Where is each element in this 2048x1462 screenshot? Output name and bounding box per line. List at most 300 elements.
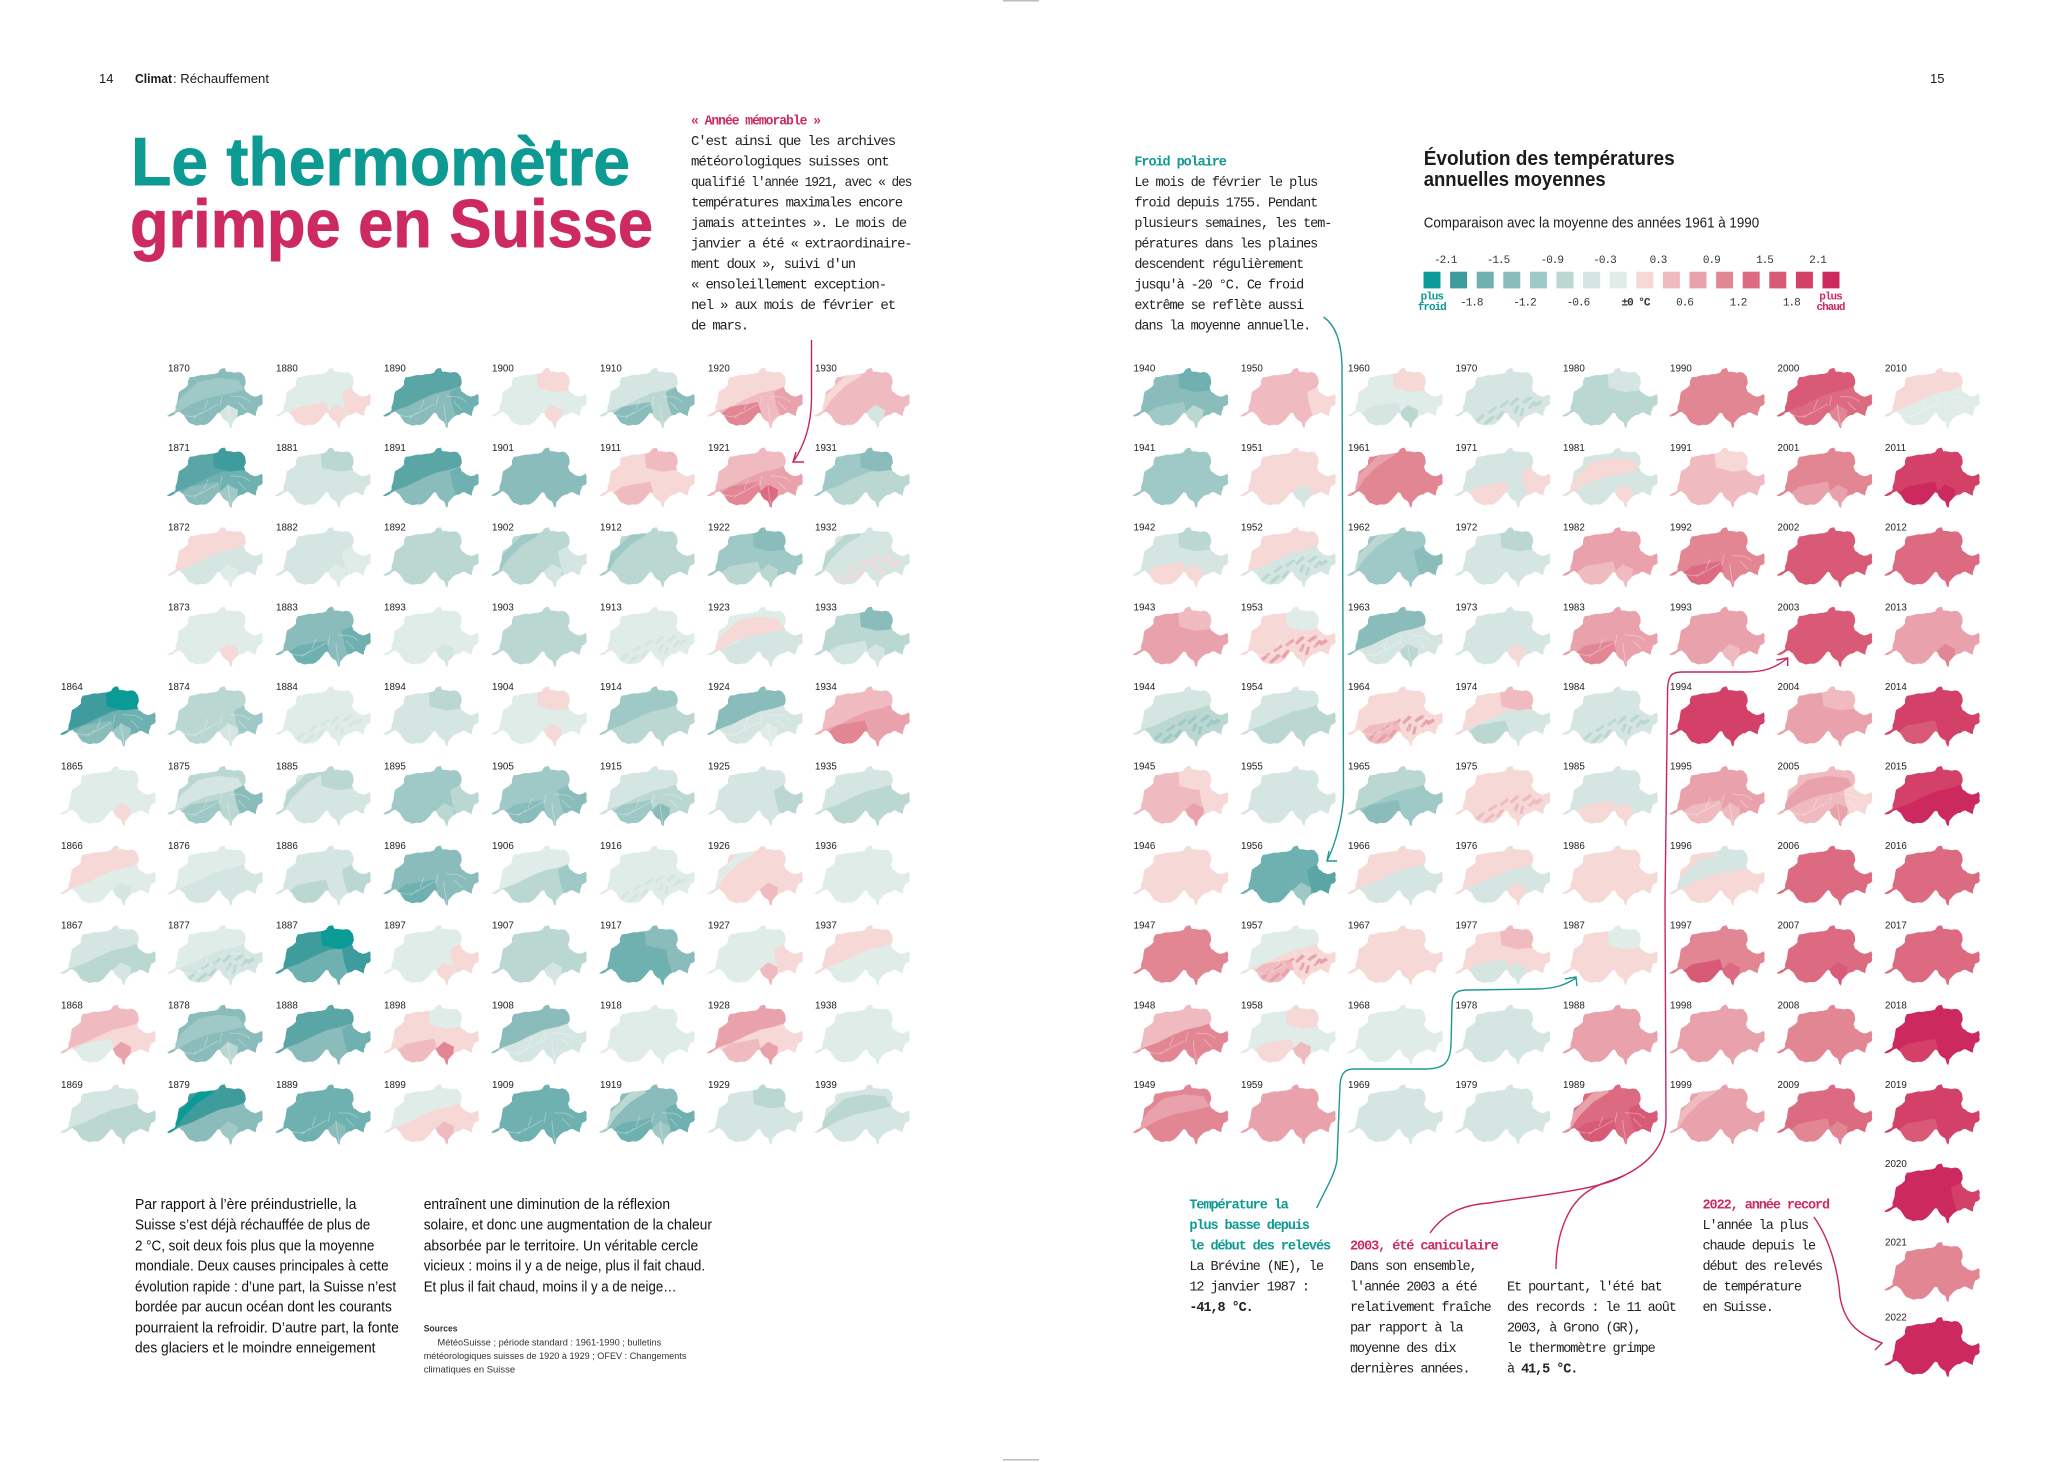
- map 2000: [1776, 364, 1874, 429]
- map 1874: 1874: [168, 682, 190, 693]
- map 2007: [1776, 921, 1872, 986]
- map 1887: 1887: [276, 921, 298, 932]
- map 1995: [1669, 762, 1765, 827]
- map 1865: 1865: [61, 762, 83, 772]
- map 1911: 1911: [600, 443, 621, 454]
- chart heading: [1424, 147, 1675, 191]
- map 1930: 1930: [815, 364, 837, 374]
- page number right: 15: [1930, 71, 1944, 86]
- map 1996: 1996: [1670, 841, 1692, 852]
- map 1954: 1954: [1241, 682, 1263, 693]
- callout: 2022, année record: en Suisse.: [1702, 1301, 1773, 1316]
- sources: climatiques en Suisse: [424, 1364, 515, 1376]
- map 2001: 2001: [1778, 443, 1799, 454]
- map 1967: [1347, 921, 1443, 986]
- map 2021: [1884, 1238, 1980, 1302]
- callout: 2022, année record: de température: [1702, 1280, 1802, 1296]
- map 1907: 1907: [492, 921, 514, 932]
- map 1902: 1902: [492, 523, 514, 534]
- callout: 2003, été caniculaire: moyenne des dix: [1350, 1342, 1456, 1357]
- legend: 0.3: [1650, 255, 1667, 267]
- map 2013: 2013: [1885, 602, 1907, 613]
- map 1947: [1132, 921, 1228, 986]
- map 1955: [1240, 762, 1336, 826]
- map 1932: 1932: [815, 523, 837, 534]
- map 1892: [383, 523, 479, 588]
- map 1871: 1871: [168, 443, 190, 454]
- map 1962: [1347, 523, 1445, 588]
- map 1870: [167, 364, 263, 429]
- map 1939: 1939: [815, 1080, 837, 1091]
- page header left: [99, 71, 269, 86]
- map 1942: 1942: [1134, 523, 1155, 534]
- sources: météorologiques suisses de 1920 à 1929 ; OFEV : Changements: [424, 1351, 687, 1362]
- map 1954: [1240, 682, 1338, 747]
- callout: température la plus basse: [1189, 1198, 1331, 1316]
- map 1964: 1964: [1348, 682, 1370, 693]
- body text column 1: Suisse s’est déjà réchauffée de plus de: [135, 1218, 370, 1234]
- map 1871: [167, 443, 265, 509]
- legend: 0.9: [1703, 255, 1720, 267]
- map 1929: [707, 1080, 803, 1145]
- map 1910: [599, 364, 697, 429]
- map 1955: 1955: [1241, 762, 1263, 772]
- map 1981: [1562, 443, 1658, 509]
- map 1973: 1973: [1456, 602, 1478, 613]
- map 1928: 1928: [708, 1000, 730, 1011]
- map 1931: 1931: [815, 443, 837, 454]
- map 1923: [707, 602, 805, 667]
- map 1893: [383, 602, 479, 668]
- map 1938: [814, 1000, 910, 1065]
- map 1894: 1894: [384, 682, 406, 693]
- map 1896: 1896: [384, 841, 406, 852]
- body text column 2: Et plus il fait chaud, moins il y a de neige…: [424, 1279, 676, 1295]
- map 2005: [1776, 762, 1874, 827]
- chart heading: annuelles moyennes: [1424, 169, 1606, 191]
- map 1899: 1899: [384, 1080, 406, 1091]
- callout: 2022, année record: [1702, 1198, 1830, 1316]
- map 1992: 1992: [1670, 523, 1692, 534]
- map 1992: [1669, 523, 1765, 588]
- map 2011: 2011: [1885, 443, 1906, 454]
- callout: température la plus basse: -41,8 °C.: [1189, 1301, 1253, 1316]
- callout: 2003, été caniculaire: 2003, été caniculaire: [1350, 1240, 1499, 1254]
- map 1935: [814, 762, 912, 827]
- map 1979: [1454, 1080, 1550, 1145]
- map 1971: [1454, 443, 1552, 509]
- map 1917: [599, 921, 697, 986]
- body text column 1: mondiale. Deux causes principales à cette: [135, 1259, 389, 1275]
- map 2009: [1776, 1080, 1872, 1145]
- map 1890: 1890: [384, 364, 406, 374]
- map 1947: 1947: [1134, 921, 1155, 932]
- map 1889: 1889: [276, 1080, 298, 1091]
- map 1877: [167, 921, 265, 986]
- map 1942: [1132, 523, 1228, 588]
- map 1903: 1903: [492, 602, 514, 613]
- map 1866: [60, 841, 158, 907]
- map 1956: [1240, 841, 1338, 907]
- map 1932: [814, 523, 910, 588]
- map 1940: 1940: [1134, 364, 1156, 374]
- map 1966: [1347, 841, 1445, 906]
- map 1915: 1915: [600, 762, 622, 772]
- map 2009: 2009: [1778, 1080, 1799, 1091]
- map 1913: [599, 602, 695, 667]
- map 1952: [1240, 523, 1338, 588]
- map 1985: 1985: [1563, 762, 1585, 772]
- map 1983: 1983: [1563, 602, 1585, 613]
- map 2016: [1884, 841, 1980, 906]
- callout: froid polaire: jusqu'à -20 °C. Ce froid: [1134, 278, 1303, 294]
- map 1895: 1895: [384, 762, 406, 772]
- map 2012: [1884, 523, 1980, 588]
- map 2007: 2007: [1778, 921, 1799, 932]
- map 1879: 1879: [168, 1080, 190, 1091]
- map 1919: 1919: [600, 1080, 622, 1091]
- callout: température la plus basse: le début des relevés: [1189, 1240, 1331, 1254]
- callout: 2022, année record: chaude depuis le: [1702, 1240, 1816, 1254]
- map 2022: 2022: [1885, 1312, 1907, 1324]
- map 2014: 2014: [1885, 682, 1907, 693]
- callout: année mémorable: ment doux », suivi d'un: [691, 258, 855, 273]
- map 1953: [1240, 602, 1336, 667]
- map 1924: [707, 682, 805, 747]
- callout: température la plus basse: Température la: [1189, 1198, 1289, 1214]
- map 1936: [814, 841, 910, 906]
- map 1921: [707, 443, 805, 509]
- map 1987: 1987: [1563, 921, 1585, 932]
- map 1884: 1884: [276, 682, 298, 693]
- map 1890: [383, 364, 481, 428]
- map 1918: [599, 1000, 695, 1065]
- map 1976: 1976: [1456, 841, 1478, 852]
- callout: année mémorable: C'est ainsi que les archives: [691, 135, 895, 150]
- callout: froid polaire: extrême se reflète aussi: [1134, 299, 1304, 314]
- map 1866: 1866: [61, 841, 83, 852]
- legend: -1.2: [1513, 298, 1536, 310]
- map 1980: 1980: [1563, 364, 1585, 374]
- arrow: année mémorable to 1921: [793, 340, 812, 462]
- map 1912: 1912: [600, 523, 622, 534]
- map 2017: 2017: [1885, 921, 1907, 932]
- map 1945: [1132, 762, 1230, 827]
- body text column 2: solaire, et donc une augmentation de la chaleur: [424, 1218, 712, 1234]
- legend: 0.6: [1676, 298, 1693, 310]
- map 1879: [167, 1080, 265, 1145]
- map 1961: [1347, 443, 1443, 508]
- legend: -0.6: [1567, 298, 1590, 310]
- callout: année mémorable: de mars.: [691, 320, 748, 334]
- map 1978: [1454, 1000, 1550, 1065]
- map 1920: 1920: [708, 364, 730, 374]
- callout: 2022, année record: L'année la plus: [1702, 1219, 1808, 1234]
- map 1949: 1949: [1134, 1080, 1155, 1091]
- map 1930: [814, 364, 910, 429]
- callout: 2003, été caniculaire: relativement fraîche: [1350, 1301, 1492, 1316]
- map 1880: [275, 364, 373, 429]
- map 1975: 1975: [1456, 762, 1478, 772]
- legend: 1.8: [1783, 298, 1800, 310]
- map 2006: 2006: [1778, 841, 1800, 852]
- map 1978: 1978: [1456, 1000, 1478, 1011]
- callout: année mémorable: [691, 114, 912, 334]
- callout: froid polaire: Froid polaire: [1134, 156, 1227, 170]
- map 1898: [383, 1000, 479, 1066]
- map 1885: [275, 762, 371, 826]
- map 1951: [1240, 443, 1336, 509]
- map 2015: 2015: [1885, 762, 1907, 772]
- legend: froid: [1418, 302, 1446, 314]
- map 1952: 1952: [1241, 523, 1263, 534]
- callout: froid polaire: Le mois de février le plus: [1134, 176, 1317, 191]
- map 1877: 1877: [168, 921, 190, 932]
- map 1943: [1132, 602, 1228, 667]
- map 1883: 1883: [276, 602, 298, 613]
- map 2005: 2005: [1778, 762, 1800, 772]
- map 1969: [1347, 1080, 1443, 1145]
- map 2022: [1884, 1312, 1980, 1377]
- callout: et pourtant: le thermomètre grimpe: [1507, 1342, 1656, 1357]
- map 1998: [1669, 1000, 1765, 1065]
- map 1946: 1946: [1134, 841, 1156, 852]
- map 1875: [167, 762, 265, 827]
- map 1869: [60, 1080, 158, 1145]
- map 1884: [275, 682, 371, 747]
- map 1993: [1669, 602, 1765, 668]
- callout: année mémorable: janvier a été « extraordinaire-: [691, 238, 912, 252]
- map 1916: [599, 841, 695, 906]
- chart heading: Évolution des températures: [1424, 147, 1675, 170]
- map 1941: [1132, 443, 1228, 508]
- map 2008: [1776, 1000, 1872, 1065]
- map 1881: 1881: [276, 443, 298, 454]
- map 1878: [167, 1000, 263, 1066]
- map 2021: 2021: [1885, 1238, 1907, 1248]
- map 1957: 1957: [1241, 921, 1263, 932]
- map 1967: 1967: [1348, 921, 1370, 932]
- map 1922: 1922: [708, 523, 730, 534]
- map 1867: 1867: [61, 921, 83, 932]
- callout: année mémorable: météorologiques suisses ont: [691, 156, 889, 170]
- map 1908: [491, 1000, 589, 1065]
- map 1997: [1669, 921, 1765, 986]
- map 1983: [1562, 602, 1658, 668]
- map 1935: 1935: [815, 762, 837, 772]
- map 1905: [491, 762, 589, 827]
- callout: température la plus basse: 12 janvier 1987 :: [1189, 1280, 1309, 1296]
- map 1976: [1454, 841, 1552, 907]
- legend: ±0 °C: [1621, 298, 1651, 310]
- map 1891: 1891: [384, 443, 406, 454]
- map 1897: 1897: [384, 921, 406, 932]
- map grid: 1940-2022: [1132, 364, 1982, 1377]
- map 1885: 1885: [276, 762, 298, 772]
- map 1928: [707, 1000, 805, 1066]
- map 1914: 1914: [600, 682, 622, 693]
- callout: 2003, été caniculaire: par rapport à la: [1350, 1322, 1463, 1336]
- map 2012: 2012: [1885, 523, 1907, 534]
- map 2011: [1884, 443, 1980, 509]
- map 2003: 2003: [1778, 602, 1800, 613]
- callout: froid polaire: dans la moyenne annuelle.: [1134, 320, 1310, 334]
- legend: 1.2: [1730, 298, 1747, 310]
- legend: plus: [1819, 292, 1842, 304]
- map 1938: 1938: [815, 1000, 837, 1011]
- map 1924: 1924: [708, 682, 730, 693]
- map 2004: 2004: [1778, 682, 1800, 693]
- legend: plus: [1421, 292, 1443, 304]
- callout: et pourtant: [1507, 1280, 1676, 1378]
- map 1907: [491, 921, 587, 986]
- map 1883: [275, 602, 373, 668]
- map 1977: [1454, 921, 1550, 986]
- map 1970: [1454, 364, 1550, 428]
- map 1974: [1454, 682, 1552, 747]
- map 1960: 1960: [1348, 364, 1370, 374]
- body text column 1: évolution rapide : d’une part, la Suisse n’est: [135, 1279, 396, 1295]
- callout: et pourtant: des records : le 11 août: [1507, 1301, 1676, 1316]
- map 1963: 1963: [1348, 602, 1370, 613]
- map 1870: 1870: [168, 364, 190, 374]
- callout: température la plus basse: La Brévine (NE), le: [1189, 1260, 1324, 1275]
- map 1912: [599, 523, 695, 588]
- map 1911: [599, 443, 695, 509]
- map 2013: [1884, 602, 1980, 668]
- map 1888: [275, 1000, 373, 1065]
- map 1948: 1948: [1134, 1000, 1156, 1011]
- map 1887: [275, 921, 373, 986]
- map 1893: 1893: [384, 602, 406, 613]
- callout: année mémorable: jamais atteintes ». Le mois de: [691, 217, 907, 232]
- map 1865: [60, 762, 156, 827]
- map 1915: [599, 762, 697, 827]
- callout: année mémorable: « ensoleillement exception-: [691, 278, 886, 294]
- map 1925: 1925: [708, 762, 730, 772]
- map 1895: [383, 762, 481, 827]
- map 1995: 1995: [1670, 762, 1692, 772]
- sources: MétéoSuisse ; période standard : 1961-1990 ; bulletins: [438, 1338, 661, 1348]
- map 1945: 1945: [1134, 762, 1156, 772]
- map 1931: [814, 443, 912, 508]
- map 1926: [707, 841, 803, 907]
- arrow: 2022 to map 2022: [1814, 1217, 1882, 1350]
- map 1951: 1951: [1241, 443, 1263, 454]
- map 1868: [60, 1000, 158, 1066]
- map 1933: 1933: [815, 602, 837, 613]
- map 1965: 1965: [1348, 762, 1370, 772]
- map 1982: 1982: [1563, 523, 1585, 534]
- arrow: froid polaire to 1956: [1324, 317, 1344, 861]
- legend: chaud: [1816, 302, 1845, 314]
- map 1966: 1966: [1348, 841, 1370, 852]
- map 1990: 1990: [1670, 364, 1692, 374]
- body text column 2: entraînent une diminution de la réflexion: [424, 1197, 670, 1213]
- map 1901: [491, 443, 587, 508]
- page header left: : Réchauffement: [173, 71, 269, 86]
- map 1980: [1562, 364, 1658, 428]
- map 2020: 2020: [1885, 1159, 1907, 1170]
- map 2017: [1884, 921, 1980, 986]
- map 1901: 1901: [492, 443, 514, 454]
- map 1909: [491, 1080, 587, 1145]
- map 2002: 2002: [1778, 523, 1799, 534]
- arrow: température la plus basse to 1987: [1317, 977, 1577, 1208]
- callout: et pourtant: à 41,5 °C.: [1507, 1362, 1577, 1378]
- map 1896: [383, 841, 479, 907]
- map 1874: [167, 682, 265, 747]
- trim mark: bottom: [1003, 1459, 1039, 1460]
- map 2003: [1776, 602, 1872, 667]
- map 1929: 1929: [708, 1080, 730, 1091]
- map 1999: 1999: [1670, 1080, 1692, 1091]
- map 1984: [1562, 682, 1658, 747]
- map 1999: [1669, 1080, 1765, 1145]
- map 1909: 1909: [492, 1080, 514, 1091]
- callout: froid polaire: froid depuis 1755. Pendant: [1134, 196, 1317, 212]
- map 1881: [275, 443, 371, 508]
- callout: température la plus basse: plus basse depuis: [1189, 1219, 1310, 1234]
- map 1927: [707, 921, 805, 986]
- map 1959: 1959: [1241, 1080, 1263, 1091]
- map 1905: 1905: [492, 762, 514, 772]
- map 1913: 1913: [600, 602, 622, 613]
- map 1988: [1562, 1000, 1658, 1065]
- arrow: 2003 to map 2003: [1430, 658, 1788, 1269]
- map 2002: [1776, 523, 1872, 588]
- title: [130, 124, 653, 262]
- map 2004: [1776, 682, 1872, 747]
- map 2020: [1884, 1159, 1982, 1224]
- map 1906: 1906: [492, 841, 514, 852]
- map 1864: [60, 682, 158, 747]
- map 1950: 1950: [1241, 364, 1263, 374]
- map 1872: 1872: [168, 523, 190, 534]
- map 1959: [1240, 1080, 1336, 1145]
- map 1899: [383, 1080, 481, 1145]
- map 1956: 1956: [1241, 841, 1263, 852]
- callout: 2003, été caniculaire: dernières années.: [1350, 1362, 1470, 1378]
- callout: année mémorable: « Année mémorable »: [691, 114, 821, 130]
- page header left: Climat: [135, 71, 173, 86]
- map 1927: 1927: [708, 921, 730, 932]
- map 1987: [1562, 921, 1658, 986]
- map 1984: 1984: [1563, 682, 1585, 693]
- body text column 2: [424, 1197, 712, 1295]
- map 1950: [1240, 364, 1338, 428]
- map 1918: 1918: [600, 1000, 622, 1011]
- map 1882: 1882: [276, 523, 298, 534]
- map 1989: [1562, 1080, 1660, 1145]
- map 1988: 1988: [1563, 1000, 1585, 1011]
- map 1979: 1979: [1456, 1080, 1477, 1091]
- callout: 2022, année record: 2022, année record: [1702, 1198, 1830, 1214]
- map 1962: 1962: [1348, 523, 1370, 534]
- map 1944: [1132, 682, 1230, 747]
- callout: 2003, été caniculaire: [1350, 1240, 1499, 1378]
- legend: -0.9: [1541, 255, 1563, 267]
- map 2000: 2000: [1778, 364, 1800, 374]
- body text column 2: vicieux : moins il y a de neige, plus il fait chaud.: [424, 1259, 705, 1275]
- map 1904: [491, 682, 587, 747]
- map 1910: 1910: [600, 364, 622, 374]
- map 2014: [1884, 682, 1980, 747]
- map 1920: [707, 364, 805, 429]
- map 1998: 1998: [1670, 1000, 1692, 1011]
- map 1939: [814, 1080, 910, 1145]
- map 1934: [814, 682, 912, 747]
